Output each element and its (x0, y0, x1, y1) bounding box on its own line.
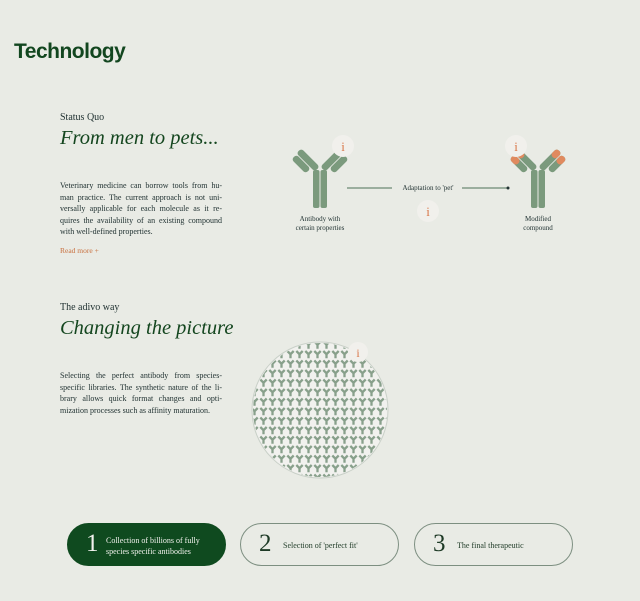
title: Technology (14, 40, 125, 63)
read more link: Read more + (60, 246, 99, 255)
body text: quires the availability of an existing compound (60, 216, 222, 224)
step 3 (414, 523, 573, 566)
kicker: Status Quo (60, 112, 104, 123)
step 3: 3 (433, 530, 446, 557)
arrow: Adaptation to 'pet' (402, 184, 454, 192)
body text: versally applicable for each molecule as it re- (60, 204, 222, 213)
step 3: The final therapeutic (457, 541, 524, 550)
icon: modified antibody (509, 148, 567, 208)
label right: Modified (525, 215, 552, 223)
body text: Veterinary medicine can borrow tools from hu- (60, 181, 222, 190)
arrow (347, 184, 510, 192)
label left: Antibody with (300, 215, 341, 223)
step 1 (67, 523, 226, 566)
icon: info: i (341, 139, 345, 154)
body text: specific libraries. The synthetic nature of the li- (60, 382, 222, 392)
step 1: 1 (86, 530, 98, 557)
icon: antibody (291, 148, 349, 208)
diagram: adaptation: compound (523, 224, 553, 232)
body text: Selecting the perfect antibody from species- (60, 371, 222, 380)
section: status quo (60, 112, 222, 255)
step 1: species specific antibodies (106, 547, 191, 556)
step 1: Collection of billions of fully (106, 536, 200, 545)
body text (60, 371, 222, 415)
body text: mization processes such as affinity maturation. (60, 406, 210, 414)
step 2: 2 (259, 530, 272, 557)
heading: From men to pets... (60, 127, 219, 149)
body text: brary allows quick format changes and opti- (60, 394, 222, 403)
diagram: adaptation: certain properties (296, 224, 345, 232)
icon: info (348, 342, 368, 362)
antibody pattern (252, 342, 388, 478)
diagram: adaptation (292, 139, 566, 232)
library circle (252, 342, 388, 478)
step 2: Selection of 'perfect fit' (283, 541, 358, 550)
icon: info (417, 200, 439, 222)
kicker: The adivo way (60, 302, 119, 313)
icon: info: i (426, 204, 430, 219)
body text (60, 181, 222, 236)
icon: info (332, 135, 354, 157)
body text: man practice. The current approach is not uni- (60, 192, 222, 202)
icon: info: i (514, 139, 518, 154)
step 2 (240, 523, 399, 566)
body text: with well-defined properties. (60, 227, 153, 236)
icon: info (505, 135, 527, 157)
section: adivo way (60, 302, 233, 415)
heading: Changing the picture (60, 317, 233, 339)
icon: info: i (356, 346, 360, 360)
